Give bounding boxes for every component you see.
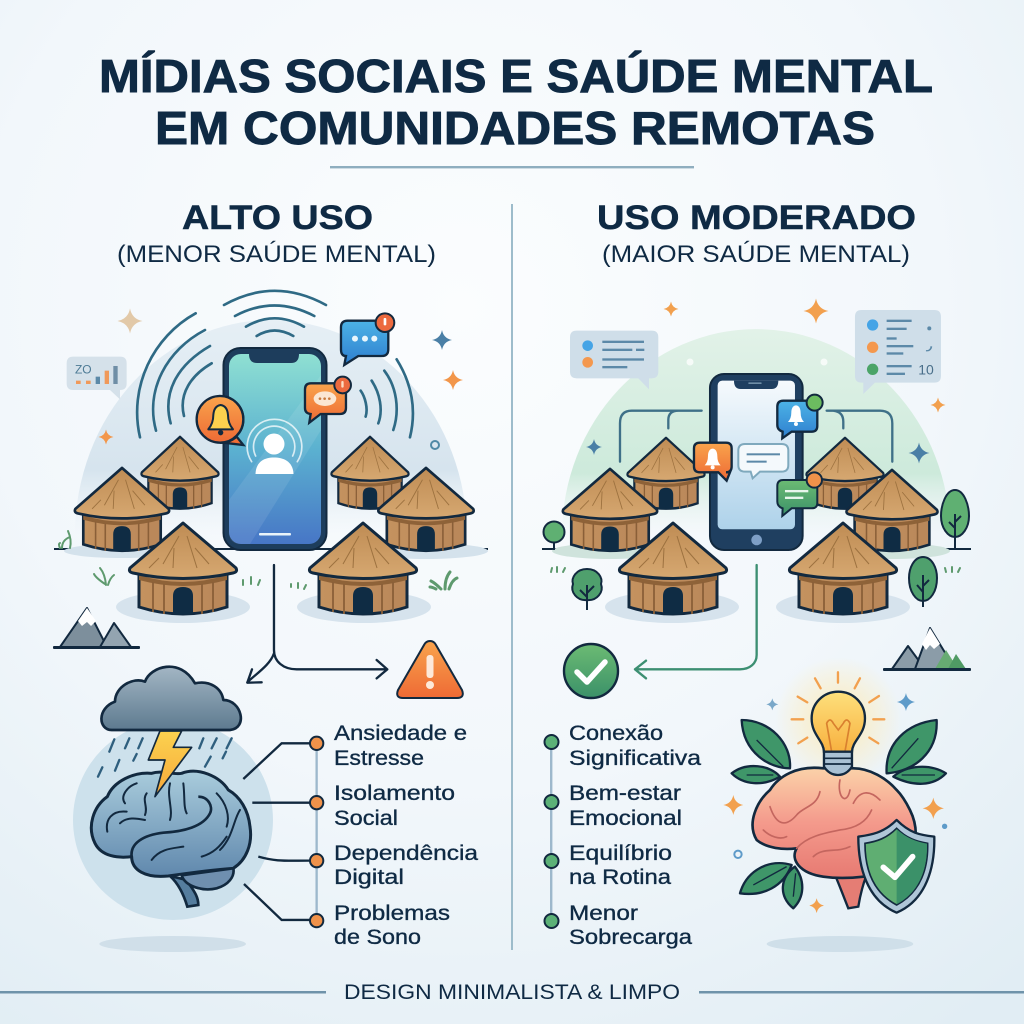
- sparkles: [586, 298, 946, 464]
- heading: uso moderado: (MAIOR SAÚDE MENTAL): [602, 241, 910, 268]
- chat bubbles on phone: [694, 395, 823, 516]
- flow arrow: [247, 565, 387, 683]
- risk list: Social: [334, 807, 398, 830]
- trees: [544, 490, 969, 610]
- stressed brain: [73, 667, 273, 952]
- risk list: Ansiedade e: [334, 722, 467, 745]
- list bubble right: [855, 310, 941, 394]
- panel: uso moderado scene: [542, 298, 971, 952]
- risk list: [334, 722, 478, 949]
- stats bubble: [67, 357, 127, 399]
- ground line: [542, 548, 971, 550]
- huts side: [563, 469, 938, 551]
- bell bubble: [197, 396, 243, 445]
- stats bubble: ZO: [75, 362, 92, 376]
- huts back row: [552, 438, 950, 559]
- risk list: de Sono: [334, 926, 421, 949]
- phone: high use: [224, 348, 326, 550]
- huts front row: [116, 523, 431, 623]
- healthy brain with bulb, leaves and shield: [723, 657, 947, 952]
- phone: moderate use: [710, 374, 803, 550]
- ground line: [54, 548, 488, 550]
- risk list: Isolamento: [334, 782, 455, 805]
- heading: uso moderado: USO MODERADO: [597, 199, 916, 237]
- list bubble right: 10: [918, 362, 934, 378]
- benefit list: na Rotina: [569, 866, 671, 889]
- sparkles: [98, 308, 463, 449]
- benefit list: Emocional: [569, 807, 682, 830]
- risk list connectors: [243, 737, 323, 927]
- huts front row: [605, 523, 910, 623]
- mountains: [54, 608, 139, 648]
- blue chat bubble: [341, 313, 394, 365]
- mountains: [884, 628, 970, 670]
- connection lines: [620, 411, 892, 462]
- title: [99, 50, 933, 154]
- panel: alto uso scene: [54, 291, 488, 952]
- benefit list: Conexão: [569, 722, 663, 745]
- background dome: [75, 320, 467, 535]
- title: EM COMUNIDADES REMOTAS: [155, 102, 875, 154]
- check icon: [564, 644, 618, 698]
- background dome: [562, 329, 950, 535]
- risk list: Digital: [334, 866, 404, 889]
- grass tufts: [551, 567, 960, 572]
- list bubble left: [570, 331, 658, 389]
- benefit list: Bem-estar: [569, 782, 681, 805]
- orange chat bubble: [305, 377, 351, 423]
- benefit list: Significativa: [569, 747, 701, 770]
- flow arrow: [635, 565, 757, 678]
- heading: uso moderado: [597, 199, 916, 268]
- risk list: Estresse: [334, 747, 424, 770]
- benefit list: Sobrecarga: [569, 926, 692, 949]
- title: MÍDIAS SOCIAIS E SAÚDE MENTAL: [99, 50, 933, 102]
- signal waves: [137, 291, 413, 437]
- huts back row: [64, 437, 488, 559]
- risk list: Problemas: [334, 902, 450, 925]
- benefit list: Equilíbrio: [569, 842, 672, 865]
- risk list: Dependência: [334, 842, 478, 865]
- heading: alto uso: (MENOR SAÚDE MENTAL): [117, 241, 436, 268]
- heading: alto uso: [117, 199, 436, 268]
- heading: alto uso: ALTO USO: [182, 199, 373, 237]
- footer: DESIGN MINIMALISTA & LIMPO: [344, 981, 680, 1004]
- grass tufts: [59, 531, 457, 589]
- benefit list: Menor: [569, 902, 638, 925]
- benefit list: [544, 722, 701, 949]
- warning icon: [397, 641, 463, 698]
